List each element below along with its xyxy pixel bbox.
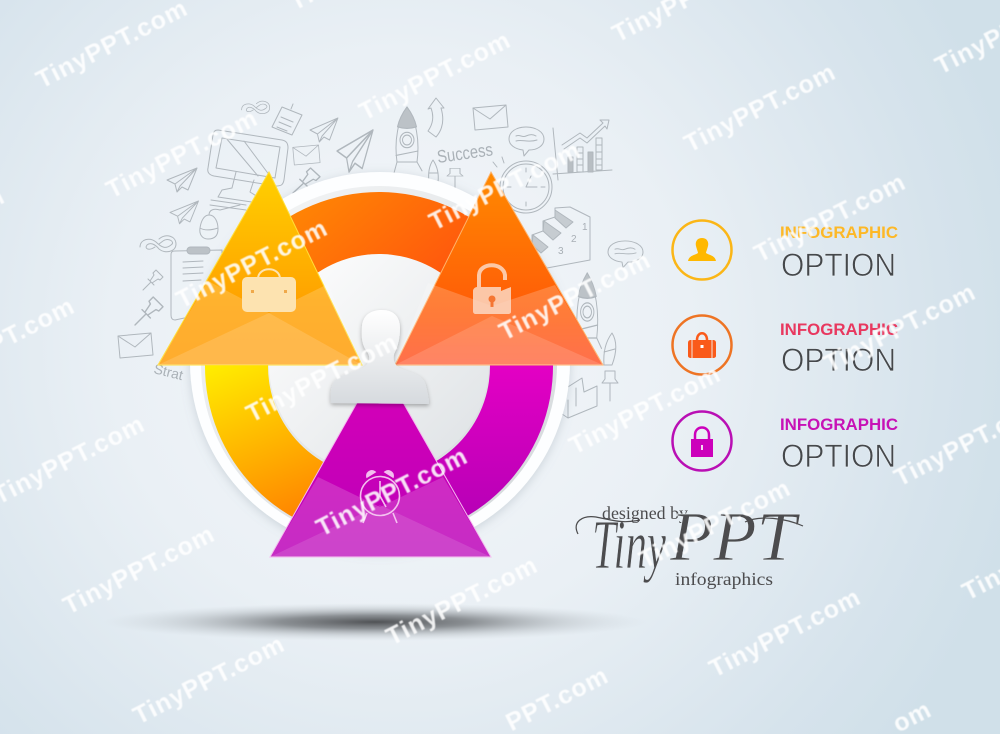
watermarks: TinyPPT.com (355, 26, 515, 126)
ring segment: top orange (205, 192, 553, 366)
watermarks: TinyPPT.com (102, 104, 262, 204)
inner white disc (269, 254, 489, 474)
ring segment: right magenta (379, 364, 553, 540)
doodle: envelope left (118, 333, 153, 358)
doodle: small pin (143, 270, 163, 290)
purple facet (270, 477, 491, 557)
watermarks: TinyPPT.com (382, 551, 542, 651)
central person bust (331, 310, 429, 404)
doodle: stairs: 3 (558, 246, 564, 257)
doodle: monitor (208, 130, 288, 210)
icon ring: bag (672, 316, 732, 374)
watermarks: TinyPPT.com (129, 630, 289, 730)
watermarks: TinyPPT.com (680, 58, 840, 158)
signature: script PPT: PPT (669, 499, 801, 576)
doodle: small rocket right (604, 333, 616, 365)
option 3 label: INFOGRAPHIC (780, 416, 898, 434)
option 2 label: INFOGRAPHIC (780, 321, 898, 339)
option 1 label: INFOGRAPHIC (780, 224, 898, 242)
doodle: clipboard (171, 250, 222, 320)
doodle: plane left 1 (167, 168, 197, 192)
floor shadow (103, 603, 647, 641)
doodle: curved arrow (428, 98, 444, 137)
doodle: envelope top right (473, 105, 508, 130)
doodle: tack right (602, 371, 618, 401)
doodle: rocket top (394, 107, 422, 173)
icon: briefcase (242, 269, 296, 312)
option 2 (672, 316, 898, 378)
doodle: stairs (532, 207, 590, 268)
option 2 word: OPTION (781, 342, 896, 378)
designer signature logo (576, 499, 803, 589)
purple triangle (270, 362, 491, 557)
doodle: tack top (447, 168, 463, 188)
doodle: small plane (310, 118, 338, 142)
signature: infographics: infographics (675, 569, 773, 589)
icon ring: person (672, 220, 732, 280)
doodle: stairs lower (560, 378, 597, 418)
yellow triangle (158, 172, 362, 365)
option 3 (672, 412, 898, 474)
doodle: plane left 2 (170, 201, 198, 224)
doodle: envelope (293, 145, 320, 165)
white outer disc (190, 172, 570, 552)
doodle: infinity top (242, 101, 270, 114)
option 1 word: OPTION (781, 247, 896, 283)
watermarks: TinyPPT.com (635, 474, 795, 574)
doodle: stairs: 2 (571, 234, 577, 245)
orange triangle (395, 172, 603, 365)
watermarks: TinyPPT.com (565, 360, 725, 460)
watermarks: TinyPPT.com (312, 442, 472, 542)
doodle: mouse (200, 205, 240, 239)
doodle: small rocket top (429, 160, 438, 182)
doodle: stairs: 1 (582, 222, 588, 233)
option 3 word: OPTION (781, 438, 896, 474)
watermarks: TinyPPT.com (59, 520, 219, 620)
icon ring: lock (672, 412, 732, 470)
doodle: big pin (135, 297, 163, 325)
yellow lower facet (158, 313, 362, 365)
doodle: clipboard clip (187, 247, 210, 254)
icon: alarm clock (360, 471, 400, 523)
main ring graphic (190, 172, 570, 552)
option 1 (672, 220, 898, 283)
doodle: speech bubble right (608, 241, 643, 268)
doodle sketches (118, 98, 643, 418)
watermarks: TinyPPT.com (495, 246, 655, 346)
signature: designed by: designed by (602, 503, 688, 523)
yellow facet (158, 281, 362, 365)
watermarks: TinyPPT.com (242, 328, 402, 428)
doodle: strategy word: Strat (152, 360, 185, 383)
doodle: rocket right (575, 273, 602, 351)
doodle: big plane (337, 130, 373, 172)
watermarks: TinyPPT.com (425, 136, 585, 236)
purple lower facet (270, 505, 491, 557)
watermarks: TinyPPT.com (705, 583, 865, 683)
doodle: success word: Success (436, 139, 494, 167)
grey disc (201, 186, 557, 542)
icon: open padlock (473, 265, 511, 314)
doodle: speech bubble (509, 127, 544, 156)
watermarks: TinyPPT.com (820, 278, 980, 378)
ring segment: left yellow (205, 364, 379, 540)
doodle: clock (493, 157, 552, 213)
orange facet (395, 283, 603, 365)
orange lower facet (395, 316, 603, 365)
watermarks: TinyPPT.com (750, 168, 910, 268)
doodle: infinity left (140, 236, 176, 252)
signature: script Tiny: Tiny (592, 507, 667, 584)
doodle: growth chart (553, 120, 612, 180)
doodle: note (272, 104, 302, 135)
signature: swashes (576, 517, 803, 534)
watermarks: TinyPPT.com (172, 214, 332, 314)
doodle: push pin top (293, 168, 320, 193)
